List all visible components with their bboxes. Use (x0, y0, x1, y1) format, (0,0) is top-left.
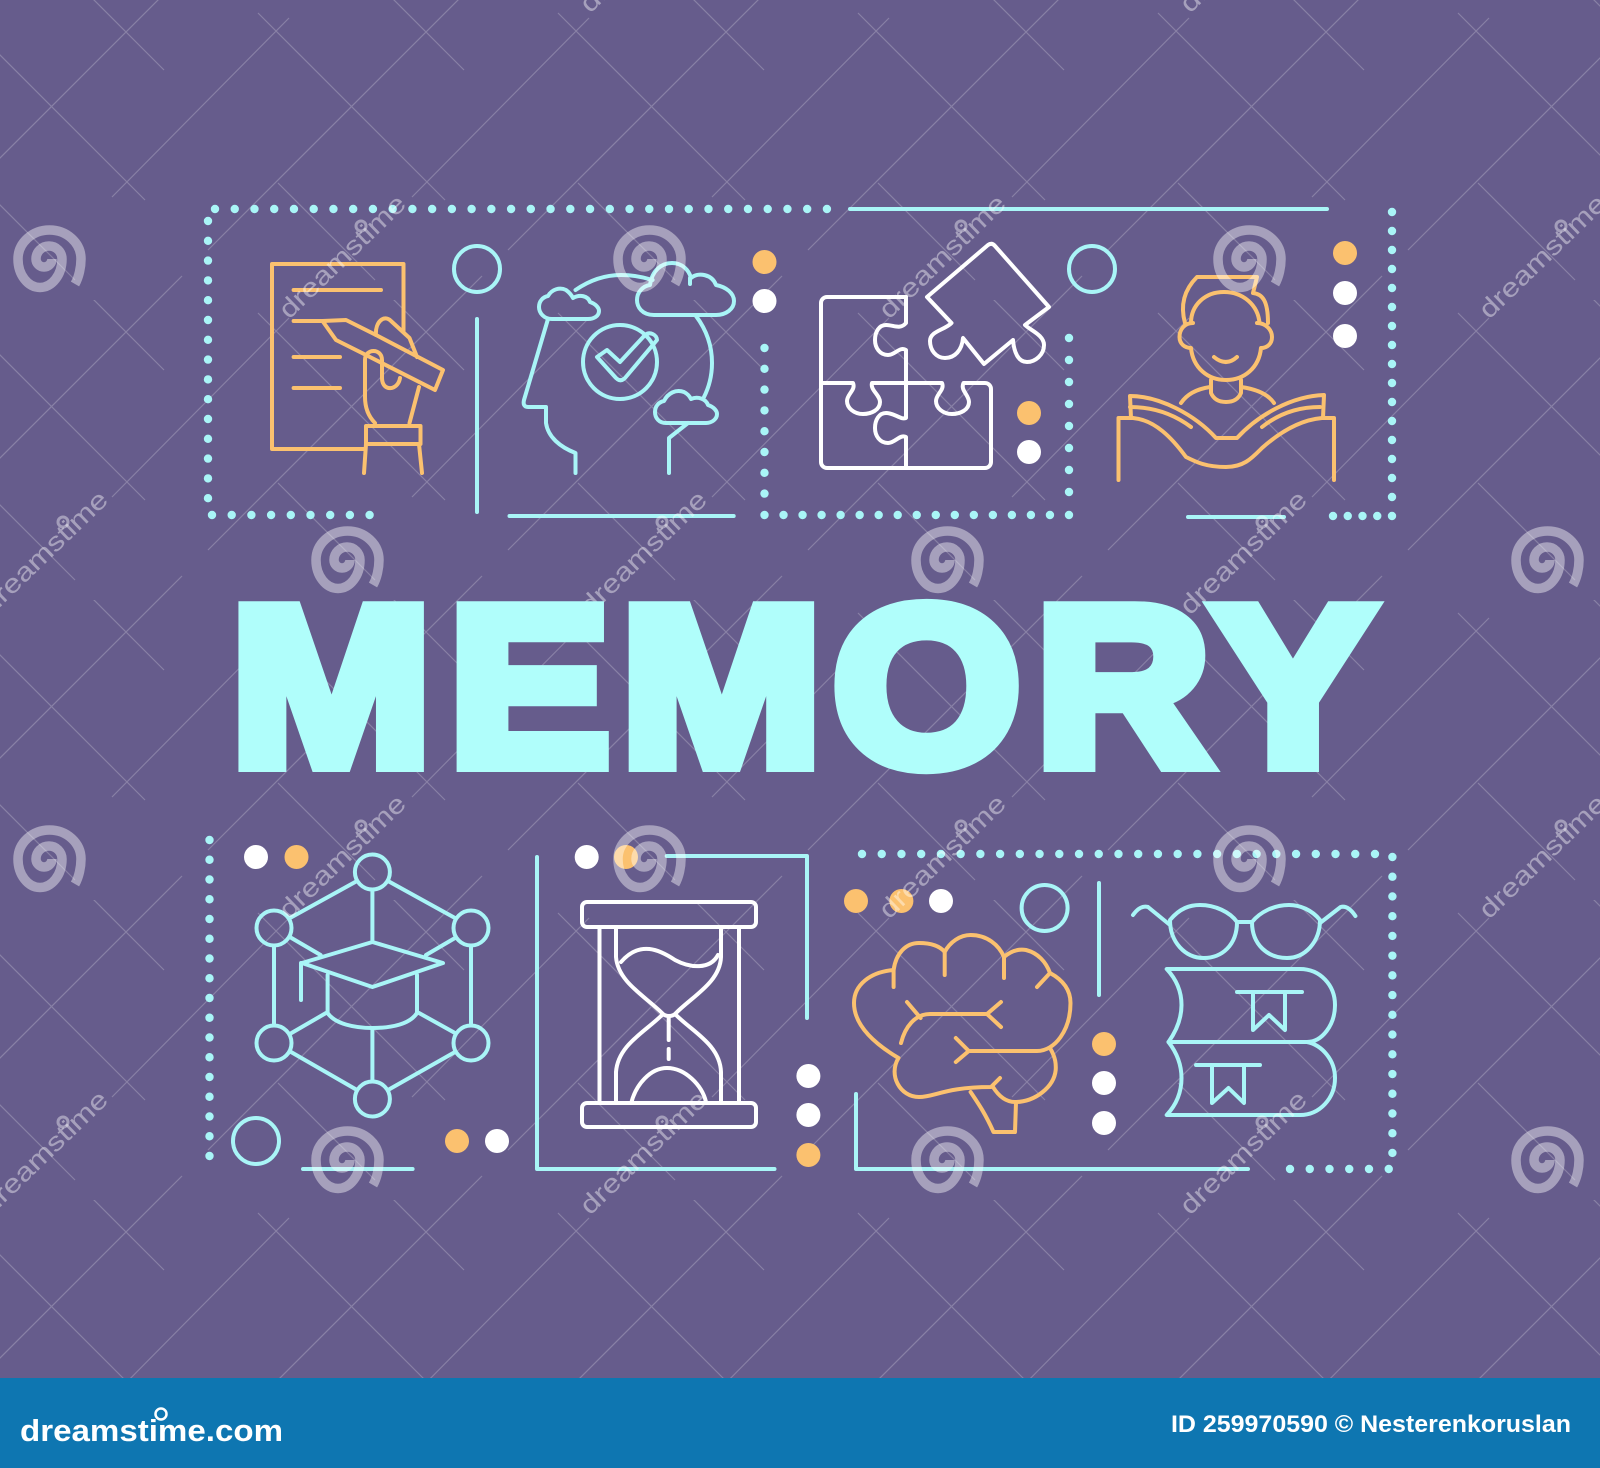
accent dots right of hourglass (796, 1064, 820, 1167)
icon: head with clouds and check mark (524, 263, 734, 473)
accent dots above brain (844, 889, 953, 913)
watermark: dreamstime spirals and captions: dreamstime (1173, 1084, 1313, 1220)
icon: hourglass (582, 902, 756, 1127)
watermark: dreamstime spirals and captions: dreamstime (573, 1084, 713, 1220)
watermark: dreamstime spirals and captions: dreamstime (272, 188, 412, 324)
watermark: dreamstime spirals and captions: dreamstime (272, 788, 412, 924)
watermark: dreamstime spirals and captions: dreamstime (1472, 788, 1600, 924)
accent dots near puzzle (1017, 401, 1041, 464)
circle outline (1069, 246, 1115, 292)
circle outline (1022, 885, 1068, 931)
accent dots left of books (1092, 1032, 1116, 1135)
dotted and solid frame lines, lower row (210, 840, 1392, 1169)
watermark: dreamstime spirals and captions: dreamstime (872, 788, 1012, 924)
icon: glasses on stacked books (1133, 905, 1355, 1115)
footer logo: dreamstime.com: dreamstime.com (20, 1413, 283, 1448)
watermark: dreamstime spirals and captions: dreamstime (1173, 484, 1313, 620)
footer logo spiral (156, 1408, 166, 1420)
lower icon row (210, 840, 1392, 1169)
accent dots above hourglass (575, 845, 638, 869)
watermark: dreamstime spirals and captions: dreamstime (573, 484, 713, 620)
dotted and solid frame lines, upper row (208, 209, 1392, 517)
footer bar (0, 1378, 1600, 1468)
accent dots below network (445, 1129, 509, 1153)
circle outline (454, 246, 500, 292)
accent dots near head (752, 250, 776, 313)
footer credit: ID 259970590 © Nesterenkoruslan (1171, 1411, 1571, 1438)
accent dots, top left of lower row (244, 845, 308, 869)
upper icon row (208, 209, 1392, 517)
icon: graduation cap in network (256, 854, 488, 1116)
watermark: dreamstime spirals and captions: dreamstime (872, 188, 1012, 324)
watermark: dreamstime spirals and captions: dreamstime (1472, 188, 1600, 324)
icon: person reading book (1118, 277, 1334, 480)
icon: brain (854, 935, 1070, 1132)
title: MEMORY (231, 561, 1373, 812)
icon: jigsaw puzzle (821, 244, 1049, 468)
circle outline (233, 1118, 279, 1164)
accent dots near reader (1333, 241, 1357, 348)
icon: hand writing on document (272, 264, 443, 473)
